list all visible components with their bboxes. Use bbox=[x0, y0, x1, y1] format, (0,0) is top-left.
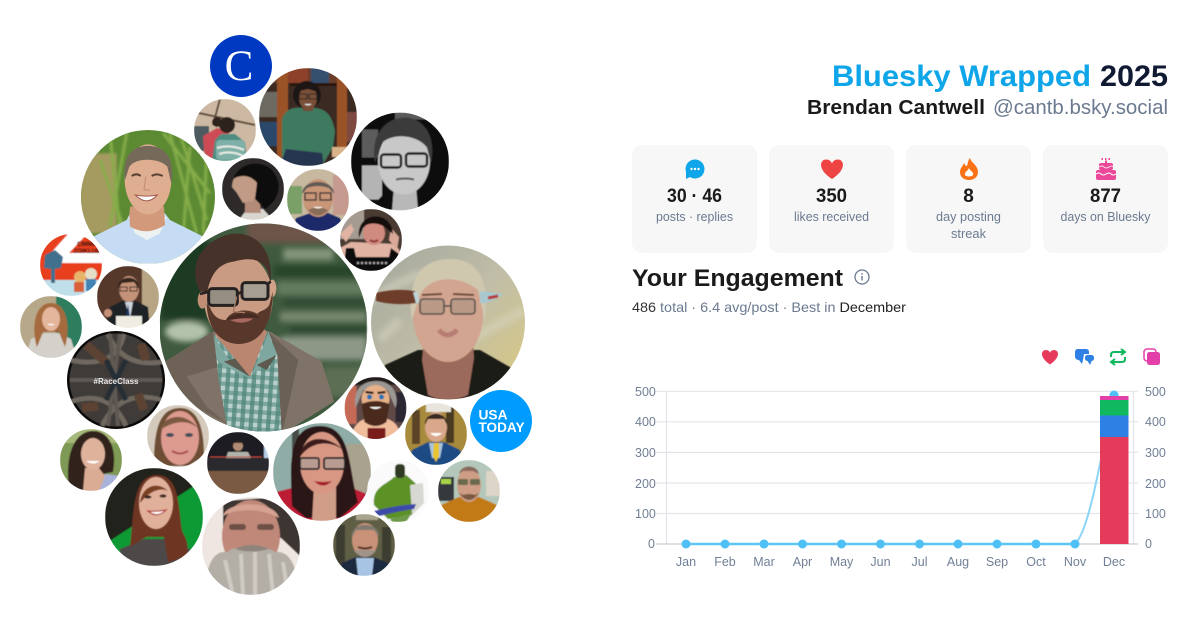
left axis labels: 300 bbox=[635, 446, 656, 460]
stat card: streak: day posting bbox=[936, 209, 1001, 224]
stat card: posts and replies: posts · replies bbox=[656, 209, 733, 224]
left axis labels: 500 bbox=[635, 385, 656, 399]
stat card: streak bbox=[906, 145, 1031, 253]
stat card: days on Bluesky: 877 bbox=[1090, 186, 1121, 207]
avatar: man in suit bbox=[333, 514, 395, 576]
right axis labels: 300 bbox=[1145, 446, 1166, 460]
engagement summary: 486 total · 6.4 avg/post · Best in December bbox=[632, 299, 906, 315]
avatar: black and white man bbox=[351, 112, 449, 210]
stat card: streak: streak bbox=[951, 226, 986, 241]
right axis labels: 0 bbox=[1145, 537, 1152, 551]
right axis labels: 400 bbox=[1145, 415, 1166, 429]
icon: chat bubble bbox=[686, 160, 704, 179]
avatar: comic cover bbox=[40, 234, 102, 296]
stat card: likes: likes received bbox=[794, 209, 869, 224]
icon: info bbox=[855, 270, 869, 284]
stat card: days on Bluesky bbox=[1043, 145, 1168, 253]
avatar: USA TODAY logo: USA bbox=[478, 406, 508, 422]
right axis labels bbox=[1145, 385, 1166, 551]
avatar: frog painting bbox=[367, 463, 424, 522]
icon: cake bbox=[1096, 158, 1116, 180]
left axis labels bbox=[635, 385, 656, 551]
avatar: C logo: C bbox=[225, 43, 253, 90]
avatar: woman with dark red hair bbox=[273, 423, 371, 521]
right axis labels: 500 bbox=[1145, 385, 1166, 399]
right axis labels: 200 bbox=[1145, 477, 1166, 491]
stat card: likes bbox=[769, 145, 894, 253]
avatar: man in orange sweater bbox=[438, 460, 500, 522]
avatar: woman on green background bbox=[105, 468, 203, 566]
title: 2025 bbox=[1100, 60, 1168, 93]
avatar: woman in profile bbox=[222, 158, 284, 220]
stacked bar: December bbox=[1100, 396, 1128, 544]
month labels: Jul bbox=[912, 555, 927, 569]
avatar: #RaceClass overpass bbox=[67, 331, 165, 429]
left axis labels: 200 bbox=[635, 477, 656, 491]
engagement heading: Your Engagement bbox=[632, 265, 843, 292]
header bbox=[807, 60, 1168, 119]
avatar: C logo bbox=[210, 35, 272, 97]
avatar: main profile photo bbox=[160, 220, 367, 433]
month labels: Jan bbox=[676, 555, 696, 569]
month labels: Oct bbox=[1026, 555, 1046, 569]
avatar: comic cover: ZOIKLUB bbox=[74, 249, 101, 255]
avatar: woman with short hair bbox=[147, 405, 209, 467]
avatar: woman with long dark hair bbox=[60, 429, 122, 491]
avatar: woman in library bbox=[259, 68, 357, 166]
line series: total bbox=[682, 390, 1118, 548]
icon: legend quotes bbox=[1144, 349, 1160, 365]
month labels: Nov bbox=[1064, 555, 1087, 569]
month labels: Aug bbox=[947, 555, 969, 569]
month labels: May bbox=[830, 555, 854, 569]
combo chart: monthly engagement bbox=[635, 385, 1166, 569]
month labels: Mar bbox=[753, 555, 775, 569]
right axis labels: 100 bbox=[1145, 507, 1166, 521]
stat card: posts and replies: 30 · 46 bbox=[667, 186, 722, 207]
left axis labels: 0 bbox=[648, 537, 655, 551]
avatar: USA TODAY logo bbox=[470, 390, 532, 452]
month labels: Jun bbox=[870, 555, 891, 569]
month labels bbox=[676, 555, 1125, 569]
month labels: Sep bbox=[986, 555, 1008, 569]
month labels: Apr bbox=[793, 555, 812, 569]
user handle: @cantb.bsky.social bbox=[993, 97, 1168, 119]
icon: legend replies bbox=[1075, 349, 1094, 365]
avatar: smiling man in green field bbox=[80, 130, 217, 263]
stat card: days on Bluesky: days on Bluesky bbox=[1060, 209, 1151, 224]
icon: legend heart bbox=[1042, 350, 1058, 364]
left axis labels: 100 bbox=[635, 507, 656, 521]
month labels: Dec bbox=[1103, 555, 1125, 569]
avatar: man with yellow tie bbox=[405, 403, 467, 465]
avatar: mascot bbox=[344, 377, 406, 440]
icon: legend reposts bbox=[1111, 349, 1125, 365]
avatar: blonde woman bbox=[20, 296, 82, 358]
stat card: posts and replies bbox=[632, 145, 757, 253]
avatar: #RaceClass overpass: #RaceClass bbox=[94, 377, 139, 386]
icon: flame bbox=[960, 158, 978, 180]
avatar: people with backpack bbox=[194, 99, 256, 161]
avatar: bearded man bbox=[202, 497, 300, 595]
stat card: streak: 8 bbox=[963, 186, 974, 207]
avatar: comic cover: CIMME bbox=[77, 242, 97, 248]
avatar: man at hearing desk bbox=[97, 266, 159, 328]
icon: heart bbox=[821, 160, 843, 179]
avatar: woman with dark bob bbox=[340, 209, 402, 271]
left axis labels: 400 bbox=[635, 415, 656, 429]
month labels: Feb bbox=[714, 555, 736, 569]
avatar: man with knife through head bbox=[371, 245, 526, 400]
avatar: USA TODAY logo: TODAY bbox=[478, 419, 525, 435]
user name: Brendan Cantwell bbox=[807, 97, 985, 119]
avatar: smiling man with glasses bbox=[287, 169, 349, 231]
avatar: man on laptop screen bbox=[207, 432, 269, 494]
title: Bluesky Wrapped bbox=[832, 60, 1091, 93]
avatar cluster bbox=[20, 35, 532, 595]
stat card: likes: 350 bbox=[816, 186, 847, 207]
chart legend bbox=[1042, 349, 1160, 365]
